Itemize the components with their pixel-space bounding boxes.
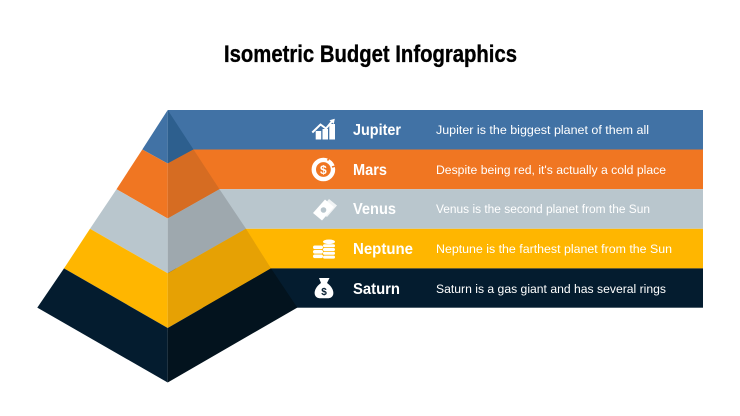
text: Saturn row [353,281,666,298]
panel: color bands [168,110,703,308]
text: Venus row [353,201,650,218]
chart: isometric pyramid [37,110,297,382]
text: Mars row: Despite being red, it's actually a cold place [436,163,666,177]
text: Neptune row [353,241,672,258]
icon: money bag [315,278,333,298]
text: Jupiter row: Jupiter is the biggest planet of them all [436,123,649,137]
icon: rising bar chart [312,119,335,140]
text: Saturn row: Saturn [353,281,400,298]
text: Neptune row: Neptune is the farthest planet from the Sun [436,242,672,256]
text: Neptune row: Neptune [353,241,413,258]
text: Venus row: Venus is the second planet from the Sun [436,202,650,216]
icon: coin stacks [313,240,335,259]
text: Jupiter row: Jupiter [353,122,401,139]
text: Venus row: Venus [353,201,396,218]
icon: money bag: $ [321,287,327,298]
text: Mars row [353,162,666,179]
title: Isometric Budget Infographics [224,41,517,68]
icon: dollar coin ring: $ [320,163,327,177]
icon: banknotes [313,199,337,220]
icon: dollar coin ring [314,156,338,179]
text: Mars row: Mars [353,162,387,179]
text: Jupiter row [353,122,649,139]
text: Saturn row: Saturn is a gas giant and has several rings [436,282,666,296]
